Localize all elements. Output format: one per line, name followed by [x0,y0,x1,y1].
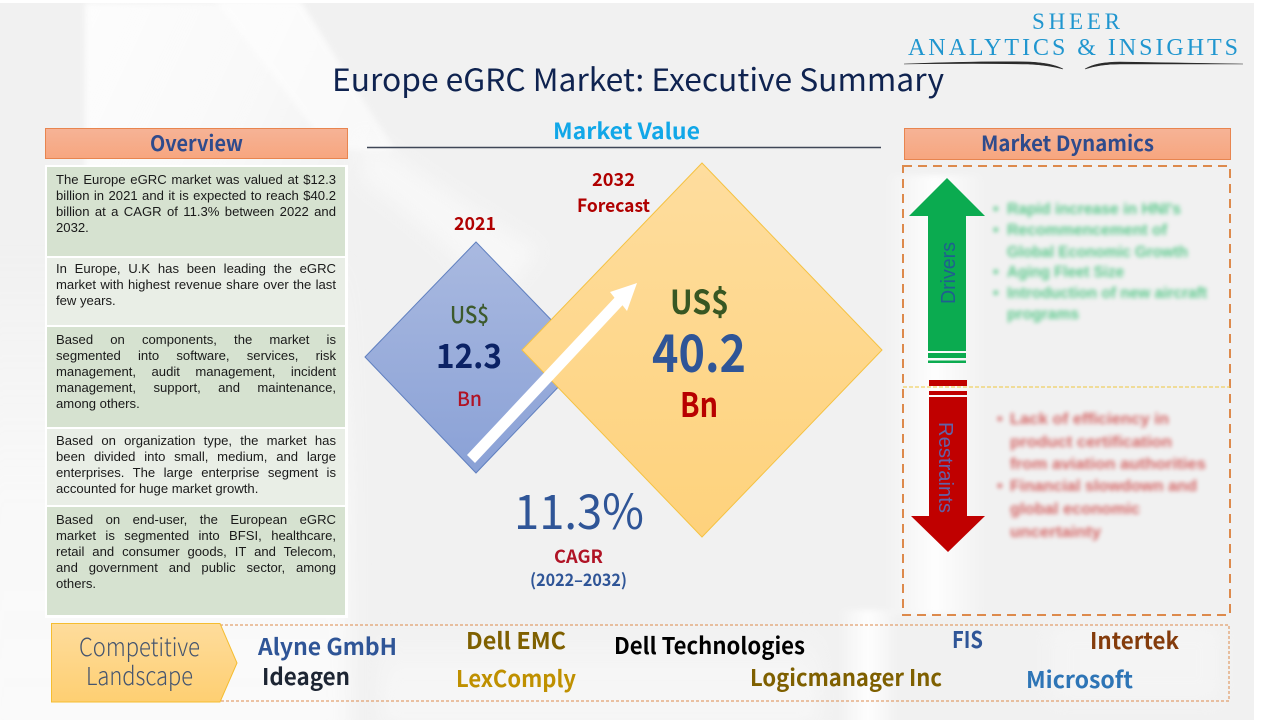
drivers list (blurred): Global Economic Growth [1007,244,1188,261]
overview row 3: Based on components, the market is [56,332,336,347]
overview row 3: management, support, and maintenance, [56,380,336,395]
restraints list (blurred): • [997,411,1003,428]
drivers list (blurred): Introduction of new aircraft [1007,285,1208,302]
label: 2032 forecast: 2032 [592,166,635,192]
overview row 3: management, audit management, incident [56,364,336,379]
overview row 2: few years. [56,293,116,308]
overview row 1: 2032. [56,220,89,235]
overview row 1: billion at a CAGR of 11.3% between 2022 and [56,204,336,219]
overview row 4 [47,429,345,505]
overview heading [45,128,348,159]
overview row 1: billion in 2021 and it is expected to reach $40.2 [56,188,336,203]
diamond: 2021 value: 12.3 [436,330,502,378]
company names: Intertek [1090,622,1179,656]
overview row 4: enterprises. The large enterprise segment is [56,465,336,480]
chevron: competitive landscape label: Competitive [79,628,200,664]
company names: Dell EMC [466,622,566,656]
CAGR callout [514,473,644,591]
diamond: 2021 value [365,242,587,473]
overview row 5 [47,507,345,615]
restraints list (blurred): Lack of efficiency in [1010,411,1169,428]
diamond: 2032 forecast value: 40.2 [652,312,746,387]
restraints list (blurred): uncertainty [1010,524,1101,541]
drivers list (blurred): • [993,201,999,218]
arrow: growth [467,283,637,463]
label: 2021: 2021 [454,210,496,236]
diamond: 2021 value: US$ [450,296,489,330]
restraints list (blurred): global economic [1010,501,1140,518]
drivers list (blurred) [993,201,1208,323]
company logo: ANALYTICS & INSIGHTS [908,35,1238,61]
market value heading: Market Value [553,114,700,146]
overview row 5: market is segmented into BFSI, healthcare, [56,528,336,543]
company logo [904,9,1243,70]
overview row 4: Based on organization type, the market has [56,433,336,448]
drivers list (blurred): • [993,285,999,302]
overview row 5: others. [56,576,96,591]
panel: overview [45,128,348,618]
overview row 5: Based on end-user, the European eGRC [56,512,336,527]
company names: LexComply [456,660,576,694]
market dynamics heading [904,128,1230,160]
overview heading: Overview [150,128,243,158]
diamond: 2032 forecast value: Bn [680,378,718,427]
company names: Logicmanager Inc [750,659,942,693]
drivers list (blurred): • [993,264,999,281]
market dynamics heading: Market Dynamics [981,128,1154,158]
drivers list (blurred): programs [1007,306,1079,323]
company names: Dell Technologies [614,627,805,661]
title: Europe eGRC Market: Executive Summary [332,55,944,100]
company names: Microsoft [1026,661,1133,695]
diamond: 2032 forecast value [522,163,882,537]
overview row 4: accounted for huge market growth. [56,481,258,496]
company names: Ideagen [262,658,350,692]
arrow: restraints [911,380,985,552]
overview row 2: In Europe, U.K has been leading the eGRC [56,261,336,276]
restraints list (blurred): Financial slowdown and [1010,478,1197,495]
overview row 5: and government and public sector, among [56,560,336,575]
company names [257,621,1179,695]
restraints list (blurred): from aviation authorities [1010,456,1206,473]
company names: Alyne GmbH [257,628,397,662]
diamond: 2021 value: Bn [457,383,482,412]
restraints list (blurred): • [997,478,1003,495]
overview row 4: been divided into small, medium, and large [56,449,336,464]
overview row 2 [47,258,345,325]
arrow: drivers [909,178,985,363]
overview row 2: market with highest revenue share over the last [56,277,336,292]
restraints list (blurred) [997,411,1206,541]
arrow: drivers: Drivers [938,242,960,304]
overview row 1 [47,167,345,256]
overview row 3: among others. [56,396,140,411]
drivers list (blurred): Aging Fleet Size [1007,264,1124,281]
drivers list (blurred): Recommencement of [1007,222,1168,239]
overview row 3 [47,327,345,427]
chevron: competitive landscape label [52,624,237,702]
company names: FIS [952,621,983,655]
CAGR callout: 11.3% [514,473,644,543]
label: 2032 forecast: Forecast [577,192,650,218]
label: 2032 forecast [577,166,650,218]
arrow: restraints: Restraints [934,422,956,513]
drivers list (blurred): • [993,222,999,239]
overview row 1: The Europe eGRC market was valued at $12.3 [56,172,336,187]
overview row 5: retail and consumer goods, IT and Telecom, [56,544,336,559]
diamond: 2032 forecast value: US$ [670,276,729,324]
drivers list (blurred): Rapid increase in HNI's [1007,201,1181,218]
CAGR callout: CAGR [554,543,603,569]
restraints list (blurred): product certification [1010,434,1172,451]
company logo: SHEER [1032,9,1121,34]
CAGR callout: (2022–2032) [530,566,627,591]
overview row 3: segmented into software, services, risk [56,348,336,363]
chevron: competitive landscape label: Landscape [86,657,193,693]
overview text blocks [45,165,348,618]
